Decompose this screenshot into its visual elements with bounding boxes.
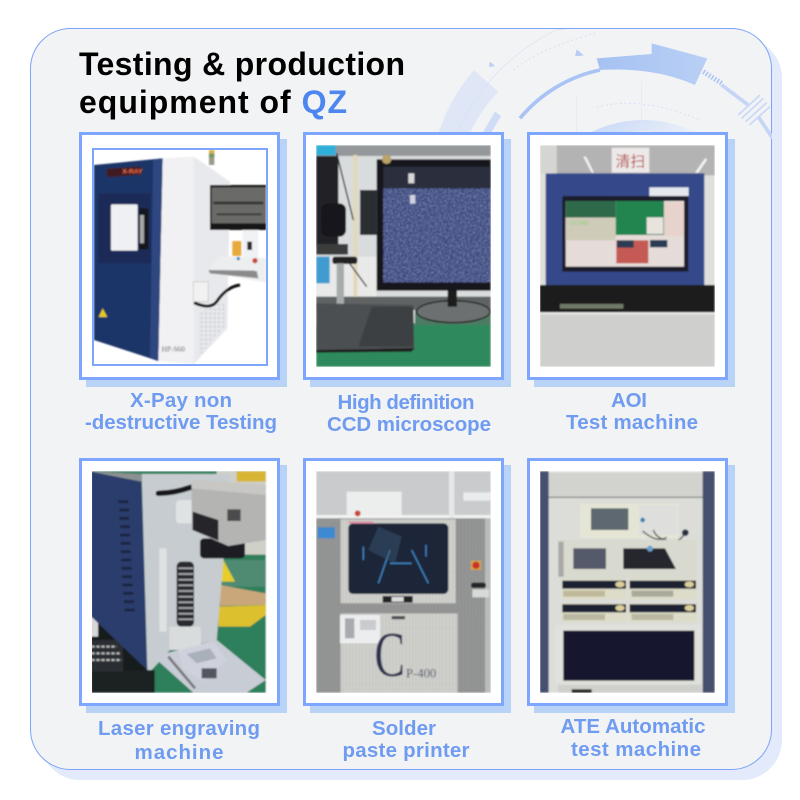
photo: AOI machine: DONE [570,220,590,227]
photo: ATE test rack [540,471,715,693]
label: machine [134,741,224,764]
photo: solder paste printer: P-400 [406,666,436,680]
label [566,389,698,434]
label: AOI [611,389,647,412]
label [85,389,277,434]
label [327,391,491,436]
title: equipment of QZ [79,84,347,120]
label: X-Pay non [130,389,232,412]
label: CCD microscope [327,413,491,436]
photo frame [80,134,278,378]
decorative gauge background [439,29,772,140]
photo frame [528,460,726,704]
photo: X-ray machine: X-RAY [122,169,143,176]
label: -destructive Testing [85,411,277,434]
photo frame [80,460,278,704]
inner photo border [93,149,267,365]
photo: AOI machine [540,145,715,367]
label: test machine [571,738,701,761]
panel: AOI test machine [528,134,735,434]
label: Solder [372,717,436,740]
panel: X-ray testing [80,134,287,434]
label: High definition [338,391,474,414]
frame shadow [86,139,287,387]
label: Laser engraving [98,717,260,740]
label: ATE Automatic [560,715,706,738]
label: paste printer [342,739,470,762]
frame shadow [310,465,511,713]
panel: solder paste printer [304,460,511,762]
panel: ATE automatic test machine [528,460,735,761]
label: Test machine [566,411,698,434]
photo: AOI machine: 清扫 [616,151,645,172]
photo frame [304,134,502,378]
panel: CCD microscope [304,134,511,436]
photo: solder paste printer [316,471,491,693]
frame shadow [310,139,511,387]
label [560,715,706,761]
frame shadow [86,465,287,713]
title [79,46,405,120]
photo: microscope and monitor [316,145,491,367]
panel: laser engraving machine [80,460,287,764]
photo frame [528,134,726,378]
label [342,717,470,762]
photo frame [304,460,502,704]
photo: laser engraver [91,471,266,693]
title: Testing & production [79,46,405,82]
frame shadow [534,139,735,387]
frame shadow [534,465,735,713]
label [98,717,260,764]
photo: X-ray machine [94,150,266,364]
photo: solder paste printer: C [374,620,405,690]
photo: X-ray machine: HP-S60 [162,345,185,354]
